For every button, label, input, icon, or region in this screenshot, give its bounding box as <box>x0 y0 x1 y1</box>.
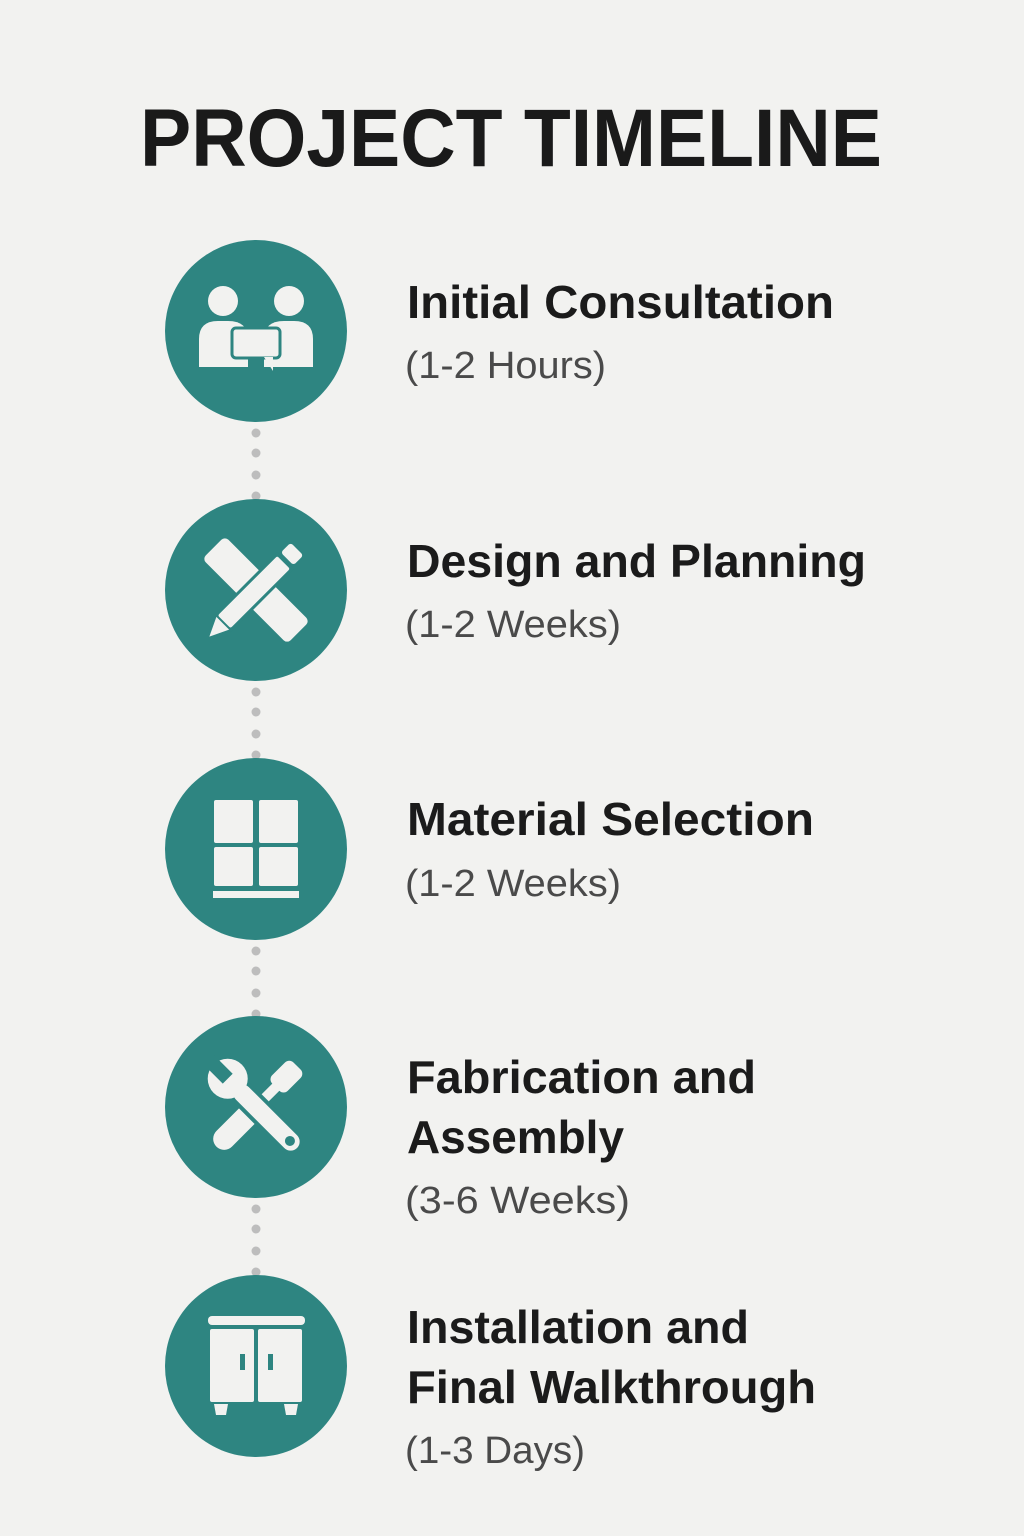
heading: Design and Planning <box>407 535 866 587</box>
step 1: initial consultation <box>165 240 834 422</box>
duration: (1-2 Weeks) <box>405 604 621 646</box>
step 4: fabrication and assembly <box>165 1016 756 1222</box>
step 5: installation: Final Walkthrough <box>407 1361 816 1413</box>
heading: Fabrication and <box>407 1051 756 1103</box>
duration: (1-3 Days) <box>405 1430 585 1472</box>
title: PROJECT TIMELINE <box>140 93 882 184</box>
icon: wrench and screwdriver <box>165 1016 347 1198</box>
step 2: design and planning <box>165 499 866 681</box>
icon: people with speech bubble <box>165 240 347 422</box>
step 3: material selection <box>165 758 814 940</box>
step 5: installation <box>165 1275 816 1472</box>
heading: Installation and <box>407 1301 749 1353</box>
heading: Material Selection <box>407 793 814 845</box>
icon: ruler and pencil <box>165 499 347 681</box>
heading: Initial Consultation <box>407 276 834 328</box>
step 4: fabrication and assembly: Assembly <box>407 1111 624 1163</box>
duration: (1-2 Weeks) <box>405 863 621 905</box>
icon: cabinet <box>165 1275 347 1457</box>
connector dots <box>252 428 260 1276</box>
duration: (1-2 Hours) <box>405 345 606 387</box>
icon: material grid <box>165 758 347 940</box>
duration: (3-6 Weeks) <box>405 1180 630 1222</box>
